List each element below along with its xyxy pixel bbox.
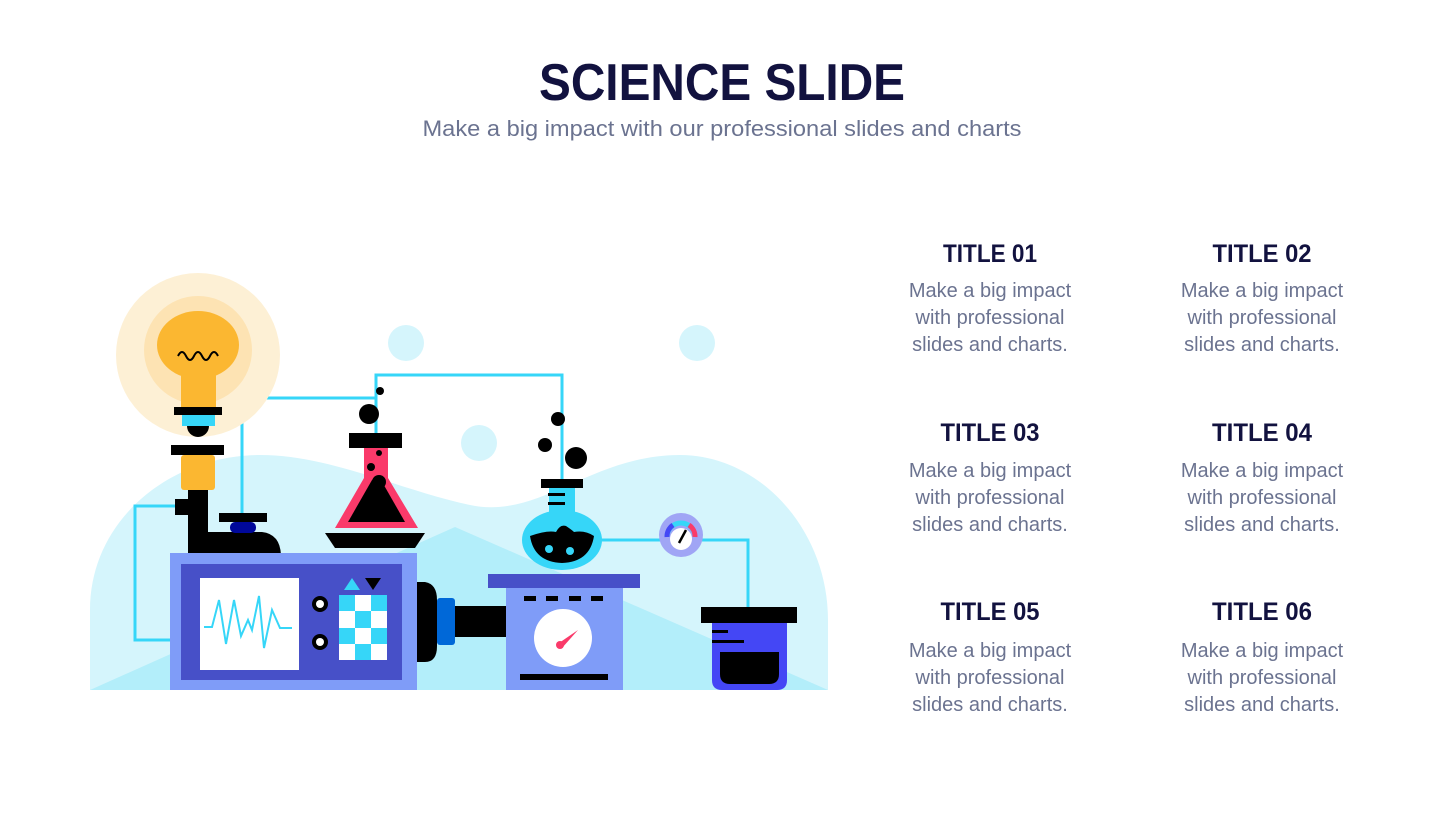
title: SCIENCE SLIDE bbox=[539, 54, 905, 112]
text block: title 03 bbox=[909, 419, 1072, 536]
text block: title 01: slides and charts. bbox=[912, 334, 1068, 356]
text block: title 04: with professional bbox=[1187, 487, 1336, 509]
text block: title 01: with professional bbox=[915, 307, 1064, 329]
icon: beaker bbox=[701, 607, 797, 690]
text block: title 02: slides and charts. bbox=[1184, 334, 1340, 356]
text block: title 02 bbox=[1181, 240, 1344, 356]
text block: title 02: Make a big impact bbox=[1181, 280, 1344, 302]
text block: title 05: with professional bbox=[915, 667, 1064, 689]
text block: title 04: Make a big impact bbox=[1181, 460, 1344, 482]
icon: round flask bbox=[522, 412, 602, 570]
text block: title 03: Make a big impact bbox=[909, 460, 1072, 482]
text block: title 04: TITLE 04 bbox=[1212, 419, 1312, 447]
icon: hot plate with dial bbox=[488, 574, 640, 690]
background hills bbox=[90, 325, 828, 690]
subtitle: Make a big impact with our professional slides and charts bbox=[422, 116, 1022, 141]
text block: title 05: slides and charts. bbox=[912, 694, 1068, 716]
icon: light bulb bbox=[116, 273, 281, 555]
text block: title 03: with professional bbox=[915, 487, 1064, 509]
text block: title 04 bbox=[1181, 419, 1344, 536]
text block: title 05 bbox=[909, 598, 1072, 716]
icon: pressure gauge bbox=[659, 513, 703, 557]
text block: title 03: slides and charts. bbox=[912, 514, 1068, 536]
illustration: science lab bbox=[90, 273, 828, 690]
machine with screen bbox=[170, 553, 507, 690]
text block: title 01 bbox=[909, 240, 1072, 356]
text block: title 06: TITLE 06 bbox=[1212, 598, 1312, 626]
text block: title 01: TITLE 01 bbox=[943, 240, 1037, 268]
text block: title 06: slides and charts. bbox=[1184, 694, 1340, 716]
text block: title 05: Make a big impact bbox=[909, 640, 1072, 662]
connecting tubes bbox=[135, 375, 748, 640]
text block: title 06: with professional bbox=[1187, 667, 1336, 689]
text block: title 03: TITLE 03 bbox=[940, 419, 1040, 447]
text block: title 02: with professional bbox=[1187, 307, 1336, 329]
text block: title 06 bbox=[1181, 598, 1344, 716]
icon: red flask bbox=[325, 387, 425, 548]
text block: title 06: Make a big impact bbox=[1181, 640, 1344, 662]
text block: title 01: Make a big impact bbox=[909, 280, 1072, 302]
text block: title 05: TITLE 05 bbox=[940, 598, 1040, 626]
text block: title 04: slides and charts. bbox=[1184, 514, 1340, 536]
text block: title 02: TITLE 02 bbox=[1212, 240, 1312, 268]
